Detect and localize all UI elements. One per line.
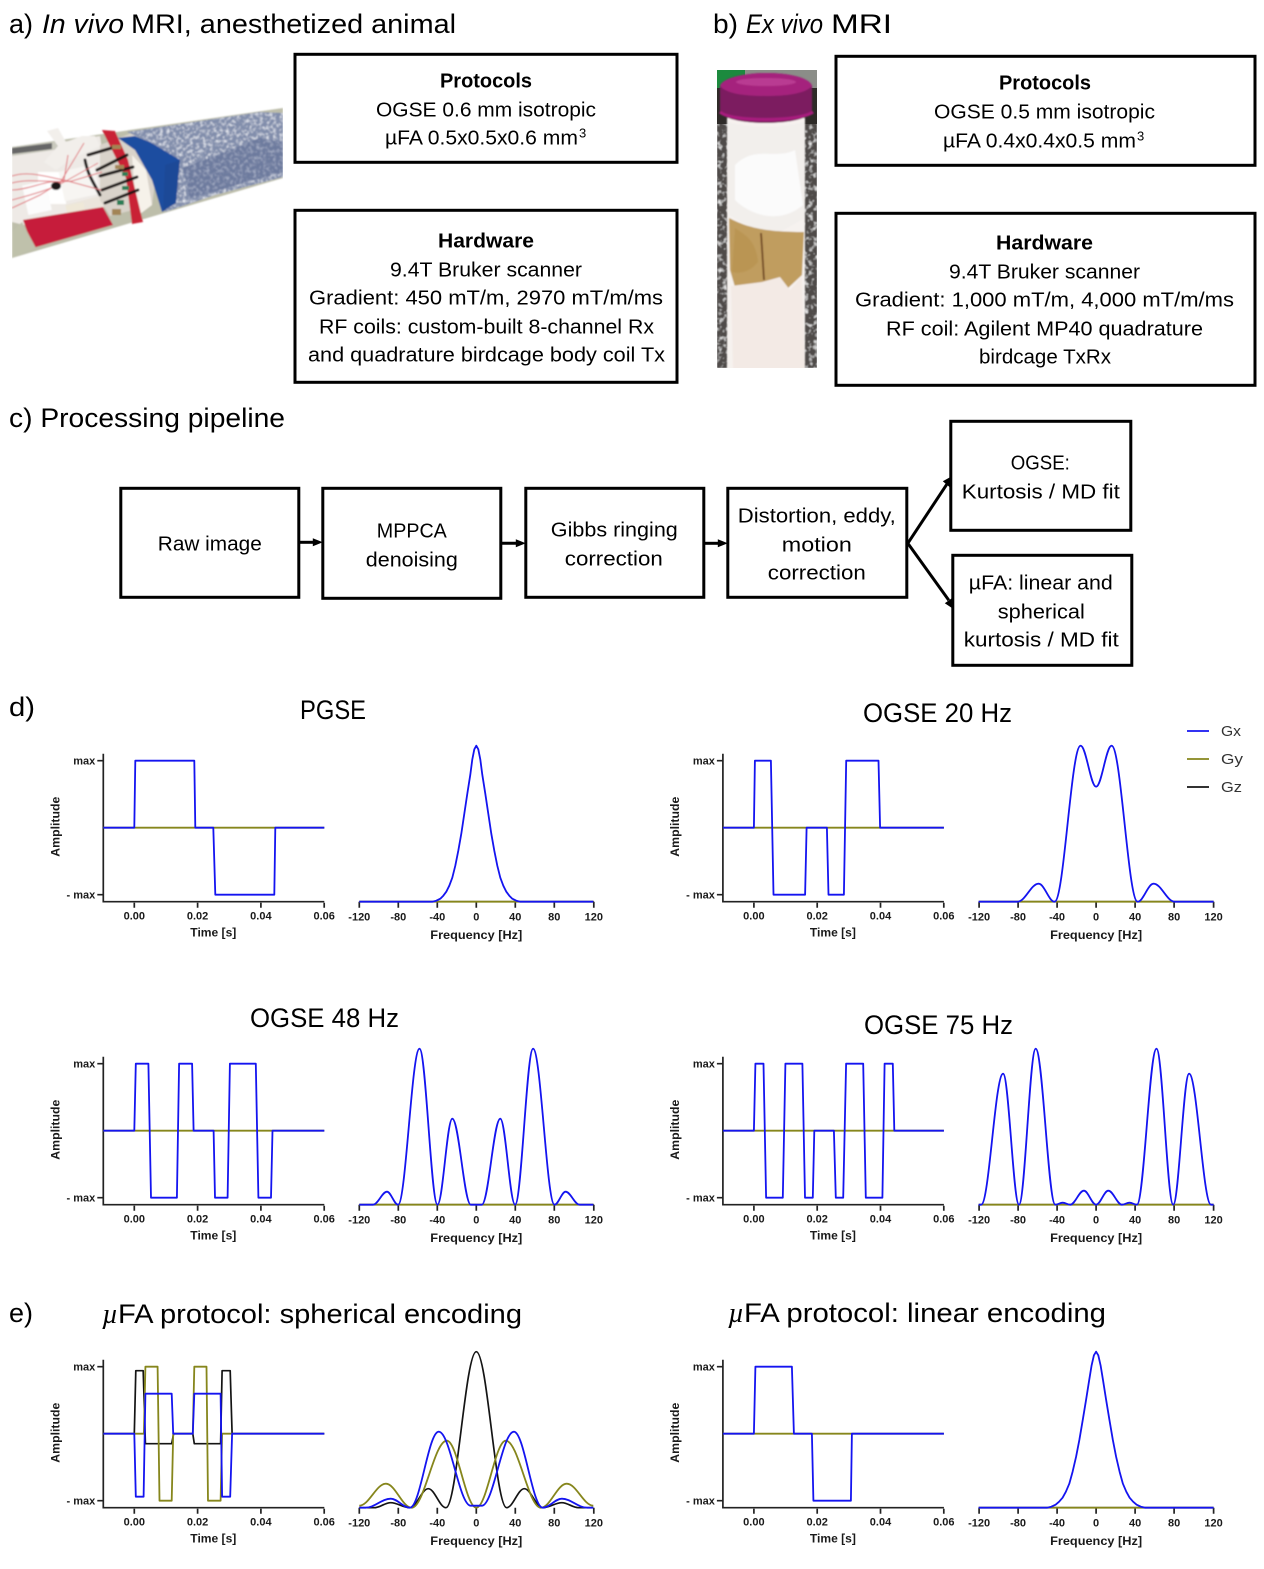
- step: Gibbs ringing correction: [526, 488, 704, 597]
- chart: linear encoding time waveform: Amplitude: [670, 1403, 682, 1463]
- chart: OGSE 48 Hz time waveform: 0.00: [124, 1214, 145, 1226]
- chart: PGSE time waveform: Amplitude: [50, 797, 62, 857]
- step: MPPCA denoising: MPPCA: [377, 519, 447, 542]
- step: Gibbs ringing correction: correction: [565, 547, 663, 570]
- chart: OGSE 75 Hz time waveform: Time [s]: [810, 1231, 856, 1243]
- box: a) hardware: Gradient: 450 mT/m, 2970 mT/m/ms: [309, 286, 663, 309]
- chart: OGSE 20 Hz frequency spectrum: -80: [1010, 912, 1026, 924]
- chart: OGSE 48 Hz frequency spectrum: -80: [390, 1215, 406, 1227]
- chart: linear encoding frequency spectrum: Frequency [Hz]: [1050, 1536, 1142, 1548]
- title: µFA linear encoding: µ: [728, 1298, 744, 1329]
- step: distortion, eddy, motion correction: Distortion, eddy,: [738, 504, 896, 527]
- chart: OGSE 48 Hz frequency spectrum: [348, 1049, 603, 1245]
- title: OGSE 75 Hz: OGSE 75 Hz: [864, 1010, 1013, 1040]
- box: b) protocols: Protocols: [999, 71, 1091, 94]
- chart: linear encoding frequency spectrum: 0: [1093, 1518, 1099, 1530]
- chart: spherical encoding frequency spectrum: 80: [548, 1518, 560, 1530]
- legend: gradient axes: [1187, 723, 1244, 796]
- title: µFA spherical encoding: µ: [102, 1299, 118, 1330]
- box: a) protocols: Protocols: [440, 69, 532, 92]
- title: OGSE 20 Hz: OGSE 20 Hz: [863, 698, 1012, 728]
- chart: OGSE 20 Hz time waveform: [670, 754, 955, 940]
- step: MPPCA denoising: denoising: [366, 548, 458, 571]
- chart: OGSE 48 Hz frequency spectrum: 80: [548, 1215, 560, 1227]
- chart: OGSE 75 Hz frequency spectrum: -40: [1049, 1215, 1065, 1227]
- chart: spherical encoding time waveform: 0.04: [250, 1517, 272, 1529]
- legend: gradient axes: Gy: [1221, 751, 1244, 768]
- step: MPPCA denoising: [323, 488, 501, 598]
- chart: PGSE time waveform: 0.04: [250, 911, 272, 923]
- chart: PGSE time waveform: 0.02: [187, 911, 208, 923]
- chart: PGSE frequency spectrum: [348, 746, 603, 942]
- chart: PGSE time waveform: max: [73, 756, 96, 768]
- heading: a) in vivo MRI: a): [9, 9, 33, 39]
- step: OGSE fit: [951, 421, 1131, 530]
- chart: PGSE time waveform: [50, 754, 335, 940]
- chart: OGSE 20 Hz time waveform: Amplitude: [670, 797, 682, 857]
- chart: PGSE time waveform: Time [s]: [190, 928, 236, 940]
- chart: OGSE 75 Hz frequency spectrum: Frequency [Hz]: [1050, 1233, 1142, 1245]
- step: Gibbs ringing correction: Gibbs ringing: [551, 518, 678, 541]
- chart: spherical encoding time waveform: [50, 1360, 335, 1546]
- step: distortion, eddy, motion correction: correction: [768, 561, 866, 584]
- box: b) hardware: [836, 213, 1255, 385]
- box: b) hardware: RF coil: Agilent MP40 quadrature: [886, 317, 1203, 340]
- box: a) protocols: µFA 0.5x0.5x0.6 mm: [385, 126, 578, 149]
- step: µFA fit: kurtosis / MD fit: [964, 628, 1119, 651]
- chart: OGSE 20 Hz time waveform: 0.04: [870, 911, 892, 923]
- chart: spherical encoding frequency spectrum: -80: [390, 1518, 406, 1530]
- box: a) hardware: 9.4T Bruker scanner: [390, 258, 582, 281]
- chart: spherical encoding frequency spectrum: 120: [585, 1518, 603, 1530]
- heading: e): e): [9, 1298, 33, 1328]
- chart: PGSE time waveform: - max: [67, 890, 96, 902]
- chart: OGSE 20 Hz time waveform: 0.00: [743, 911, 765, 923]
- heading: a) in vivo MRI: MRI, anesthetized animal: [131, 9, 456, 39]
- chart: linear encoding frequency spectrum: -80: [1010, 1518, 1026, 1530]
- step: µFA fit: spherical: [998, 600, 1085, 623]
- arrow: to µFA fit: [908, 543, 954, 609]
- chart: spherical encoding time waveform: Amplitude: [50, 1403, 62, 1463]
- chart: OGSE 75 Hz time waveform: [670, 1057, 955, 1243]
- chart: OGSE 48 Hz frequency spectrum: 40: [509, 1215, 521, 1227]
- chart: spherical encoding time waveform: Time [s]: [190, 1534, 236, 1546]
- box: b) protocols: 3: [1137, 128, 1144, 143]
- chart: linear encoding frequency spectrum: 80: [1168, 1518, 1180, 1530]
- chart: OGSE 20 Hz frequency spectrum: [968, 746, 1223, 942]
- heading: b) ex vivo MRI: b): [713, 9, 738, 39]
- flowchart: processing pipeline: [121, 421, 1132, 665]
- heading: d): d): [9, 692, 35, 722]
- chart: PGSE frequency spectrum: Frequency [Hz]: [430, 930, 522, 942]
- legend: gradient axes: Gx: [1221, 723, 1242, 740]
- chart: OGSE 48 Hz time waveform: Amplitude: [50, 1100, 62, 1160]
- chart: PGSE time waveform: 0.06: [313, 911, 335, 923]
- chart: OGSE 48 Hz time waveform: 0.02: [187, 1214, 208, 1226]
- chart: spherical encoding time waveform: - max: [67, 1496, 96, 1508]
- step: raw image: Raw image: [158, 532, 262, 555]
- chart: OGSE 75 Hz frequency spectrum: 0: [1093, 1215, 1099, 1227]
- step: distortion, eddy, motion correction: motion: [782, 533, 852, 556]
- chart: OGSE 75 Hz time waveform: 0.02: [806, 1214, 828, 1226]
- step: µFA fit: µFA: linear and: [969, 571, 1113, 594]
- chart: PGSE frequency spectrum: -40: [429, 912, 445, 924]
- step: µFA fit: [953, 555, 1132, 665]
- chart: PGSE frequency spectrum: 80: [548, 912, 560, 924]
- chart: OGSE 75 Hz time waveform: 0.00: [743, 1214, 765, 1226]
- photo: ex vivo brain in tube: [717, 70, 817, 370]
- chart: spherical encoding time waveform: 0.02: [187, 1517, 208, 1529]
- chart: linear encoding time waveform: 0.02: [806, 1517, 828, 1529]
- chart: PGSE frequency spectrum: -80: [390, 912, 406, 924]
- chart: OGSE 20 Hz time waveform: - max: [686, 890, 716, 902]
- chart: OGSE 20 Hz time waveform: Time [s]: [810, 928, 856, 940]
- chart: OGSE 48 Hz time waveform: 0.04: [250, 1214, 272, 1226]
- chart: linear encoding time waveform: 0.04: [870, 1517, 892, 1529]
- step: distortion, eddy, motion correction: [728, 488, 907, 597]
- chart: linear encoding time waveform: 0.00: [743, 1517, 765, 1529]
- chart: OGSE 75 Hz time waveform: 0.04: [870, 1214, 892, 1226]
- box: a) protocols: [295, 54, 677, 162]
- chart: OGSE 75 Hz frequency spectrum: 120: [1204, 1215, 1223, 1227]
- heading: c) processing pipeline: c) Processing pipeline: [9, 403, 285, 433]
- chart: OGSE 75 Hz time waveform: 0.06: [933, 1214, 955, 1226]
- box: a) protocols: 3: [579, 125, 586, 140]
- arrow: MPPCA to Gibbs: [502, 539, 526, 547]
- box: b) hardware: Gradient: 1,000 mT/m, 4,000 mT/m/ms: [855, 288, 1234, 311]
- legend: gradient axes: Gz: [1221, 779, 1242, 796]
- chart: OGSE 75 Hz frequency spectrum: [968, 1049, 1223, 1245]
- box: a) hardware: [295, 210, 677, 382]
- chart: PGSE frequency spectrum: 40: [509, 912, 521, 924]
- chart: OGSE 20 Hz frequency spectrum: 40: [1129, 912, 1141, 924]
- box: a) hardware: Hardware: [438, 229, 534, 252]
- chart: OGSE 75 Hz time waveform: max: [693, 1059, 716, 1071]
- title: OGSE 48 Hz: OGSE 48 Hz: [250, 1003, 399, 1033]
- chart: PGSE frequency spectrum: 120: [585, 912, 603, 924]
- chart: linear encoding frequency spectrum: -40: [1049, 1518, 1065, 1530]
- chart: linear encoding frequency spectrum: -120: [968, 1518, 990, 1530]
- box: b) hardware: Hardware: [996, 231, 1093, 254]
- chart: OGSE 75 Hz frequency spectrum: -120: [968, 1215, 990, 1227]
- chart: OGSE 20 Hz time waveform: 0.02: [806, 911, 828, 923]
- chart: OGSE 48 Hz time waveform: Time [s]: [190, 1231, 236, 1243]
- title: µFA spherical encoding: FA protocol: spherical encoding: [118, 1299, 522, 1329]
- chart: spherical encoding frequency spectrum: -120: [348, 1518, 370, 1530]
- chart: spherical encoding frequency spectrum: -40: [429, 1518, 445, 1530]
- chart: linear encoding frequency spectrum: 40: [1129, 1518, 1141, 1530]
- chart: OGSE 48 Hz frequency spectrum: Frequency [Hz]: [430, 1233, 522, 1245]
- step: OGSE fit: Kurtosis / MD fit: [962, 480, 1120, 503]
- chart: spherical encoding time waveform: max: [73, 1362, 96, 1374]
- chart: OGSE 48 Hz frequency spectrum: 120: [585, 1215, 603, 1227]
- chart: spherical encoding frequency spectrum: Frequency [Hz]: [430, 1536, 522, 1548]
- step: OGSE fit: OGSE:: [1011, 451, 1070, 474]
- chart: OGSE 48 Hz time waveform: [50, 1057, 335, 1243]
- box: b) protocols: [836, 56, 1255, 165]
- arrow: raw image to MPPCA: [300, 538, 323, 546]
- chart: linear encoding time waveform: max: [693, 1362, 716, 1374]
- chart: OGSE 20 Hz frequency spectrum: Frequency [Hz]: [1050, 930, 1142, 942]
- title: µFA linear encoding: FA protocol: linear encoding: [744, 1298, 1106, 1328]
- chart: linear encoding time waveform: Time [s]: [810, 1534, 856, 1546]
- photo: in vivo RF coil assembly: [12, 108, 283, 258]
- chart: OGSE 20 Hz frequency spectrum: 120: [1204, 912, 1223, 924]
- chart: OGSE 75 Hz time waveform: Amplitude: [670, 1100, 682, 1160]
- chart: OGSE 48 Hz frequency spectrum: -120: [348, 1215, 370, 1227]
- chart: spherical encoding frequency spectrum: 40: [509, 1518, 521, 1530]
- chart: OGSE 75 Hz time waveform: - max: [686, 1193, 716, 1205]
- box: b) hardware: 9.4T Bruker scanner: [949, 260, 1140, 283]
- chart: linear encoding time waveform: [670, 1360, 955, 1546]
- box: a) protocols: OGSE 0.6 mm isotropic: [376, 98, 596, 121]
- arrow: Gibbs to distortion: [705, 539, 728, 547]
- chart: linear encoding frequency spectrum: 120: [1204, 1518, 1223, 1530]
- chart: OGSE 48 Hz time waveform: - max: [67, 1193, 96, 1205]
- heading: b) ex vivo MRI: MRI: [831, 9, 892, 39]
- chart: OGSE 20 Hz time waveform: max: [693, 756, 716, 768]
- box: b) protocols: µFA 0.4x0.4x0.5 mm: [943, 129, 1136, 152]
- chart: PGSE frequency spectrum: 0: [473, 912, 479, 924]
- chart: OGSE 75 Hz frequency spectrum: 40: [1129, 1215, 1141, 1227]
- chart: linear encoding time waveform: - max: [686, 1496, 716, 1508]
- heading: a) in vivo MRI: [9, 9, 456, 39]
- heading: b) ex vivo MRI: [713, 9, 892, 39]
- chart: OGSE 20 Hz time waveform: 0.06: [933, 911, 955, 923]
- chart: OGSE 20 Hz frequency spectrum: 80: [1168, 912, 1180, 924]
- chart: PGSE frequency spectrum: -120: [348, 912, 370, 924]
- heading: b) ex vivo MRI: Ex vivo: [746, 9, 823, 39]
- chart: OGSE 48 Hz frequency spectrum: -40: [429, 1215, 445, 1227]
- chart: linear encoding frequency spectrum: [968, 1352, 1223, 1548]
- chart: OGSE 20 Hz frequency spectrum: -40: [1049, 912, 1065, 924]
- chart: OGSE 75 Hz frequency spectrum: -80: [1010, 1215, 1026, 1227]
- box: a) hardware: RF coils: custom-built 8-channel Rx: [319, 315, 655, 338]
- box: b) protocols: OGSE 0.5 mm isotropic: [934, 100, 1155, 123]
- chart: OGSE 48 Hz time waveform: 0.06: [313, 1214, 335, 1226]
- box: a) hardware: and quadrature birdcage body coil Tx: [308, 343, 666, 366]
- heading: a) in vivo MRI: In vivo: [42, 9, 124, 39]
- chart: OGSE 20 Hz frequency spectrum: 0: [1093, 912, 1099, 924]
- step: raw image: [121, 488, 299, 597]
- chart: OGSE 48 Hz time waveform: max: [73, 1059, 96, 1071]
- chart: OGSE 20 Hz frequency spectrum: -120: [968, 912, 990, 924]
- title: PGSE: PGSE: [300, 695, 366, 725]
- chart: spherical encoding frequency spectrum: [348, 1352, 603, 1548]
- arrow: to OGSE fit: [908, 476, 952, 543]
- chart: spherical encoding time waveform: 0.00: [124, 1517, 145, 1529]
- chart: OGSE 75 Hz frequency spectrum: 80: [1168, 1215, 1180, 1227]
- chart: PGSE time waveform: 0.00: [124, 911, 145, 923]
- chart: linear encoding time waveform: 0.06: [933, 1517, 955, 1529]
- box: b) hardware: birdcage TxRx: [979, 345, 1112, 368]
- chart: spherical encoding frequency spectrum: 0: [473, 1518, 479, 1530]
- chart: spherical encoding time waveform: 0.06: [313, 1517, 335, 1529]
- chart: OGSE 48 Hz frequency spectrum: 0: [473, 1215, 479, 1227]
